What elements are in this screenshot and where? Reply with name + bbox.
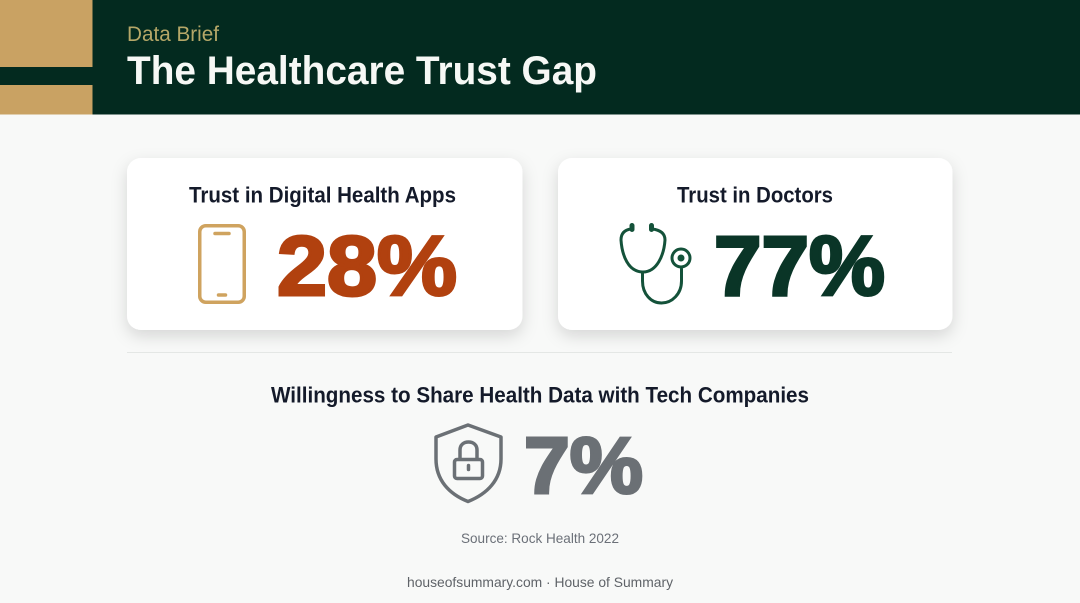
header banner — [0, 0, 1080, 114]
stat value: 77% — [714, 219, 885, 313]
card heading: Trust in Doctors — [677, 182, 833, 208]
title: The Healthcare Trust Gap — [127, 49, 597, 93]
icon: stethoscope — [621, 226, 690, 303]
section: willingness to share — [271, 382, 809, 510]
stat value: 7% — [524, 421, 643, 510]
card heading: Trust in Digital Health Apps — [189, 182, 456, 208]
gold accent block bottom — [0, 85, 92, 114]
icon: smartphone — [200, 226, 244, 302]
source note: Source: Rock Health 2022 — [461, 530, 619, 546]
stat value: 28% — [277, 219, 457, 313]
divider — [127, 352, 952, 353]
gold accent block top — [0, 0, 92, 67]
section heading: Willingness to Share Health Data with Tech Companies — [271, 382, 809, 408]
eyebrow label: Data Brief — [127, 23, 219, 46]
panel: trust in digital health apps — [127, 158, 522, 330]
icon: shield with lock — [436, 425, 501, 502]
panel: trust in doctors — [558, 158, 952, 330]
footer: houseofsummary.com · House of Summary — [407, 574, 673, 590]
